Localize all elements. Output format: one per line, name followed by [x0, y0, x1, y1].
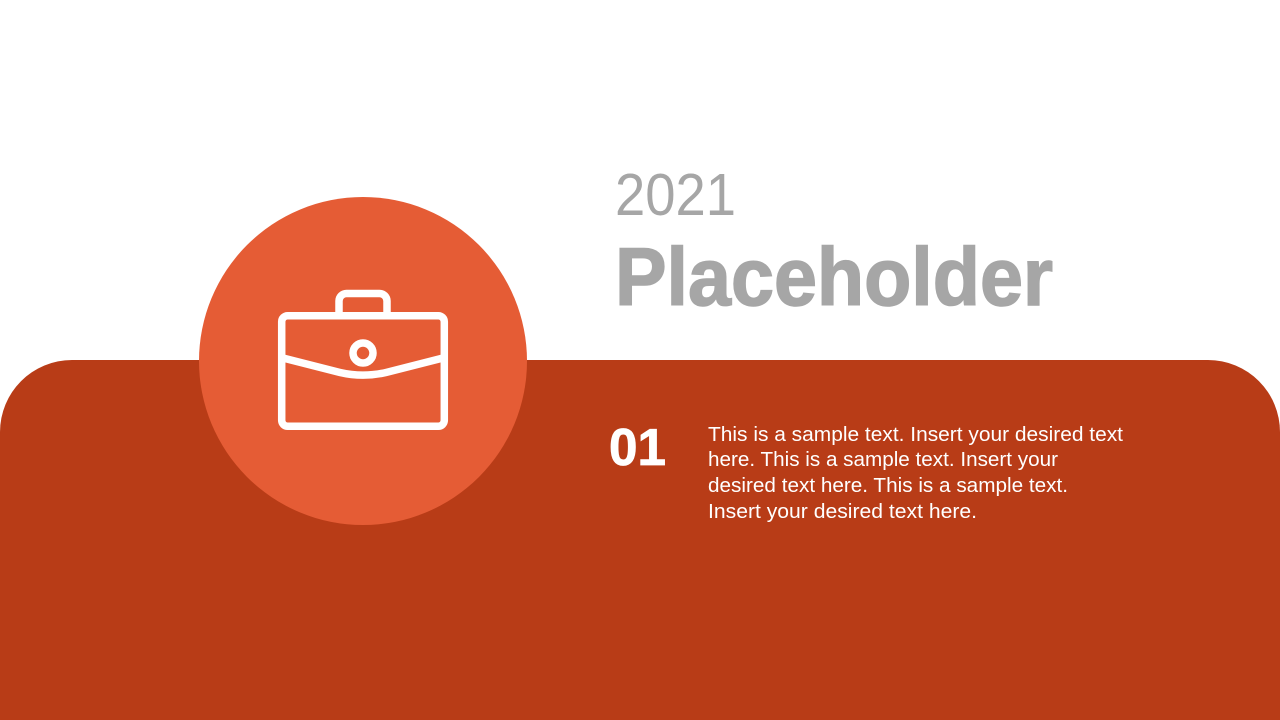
year label: 2021 — [615, 162, 736, 228]
body text: here. This is a sample text. Insert your — [708, 449, 1058, 471]
icon: briefcase — [282, 294, 444, 426]
body text: This is a sample text. Insert your desired text — [708, 424, 1123, 446]
step number: 01 — [609, 419, 666, 477]
body text: desired text here. This is a sample text. — [708, 475, 1068, 497]
orange circle badge with briefcase icon — [199, 197, 527, 525]
badge circle — [199, 197, 527, 525]
body text: Insert your desired text here. — [708, 501, 977, 523]
heading: Placeholder — [615, 232, 1053, 323]
body text — [708, 424, 1123, 523]
background panel: rounded dark orange band — [0, 360, 1280, 720]
